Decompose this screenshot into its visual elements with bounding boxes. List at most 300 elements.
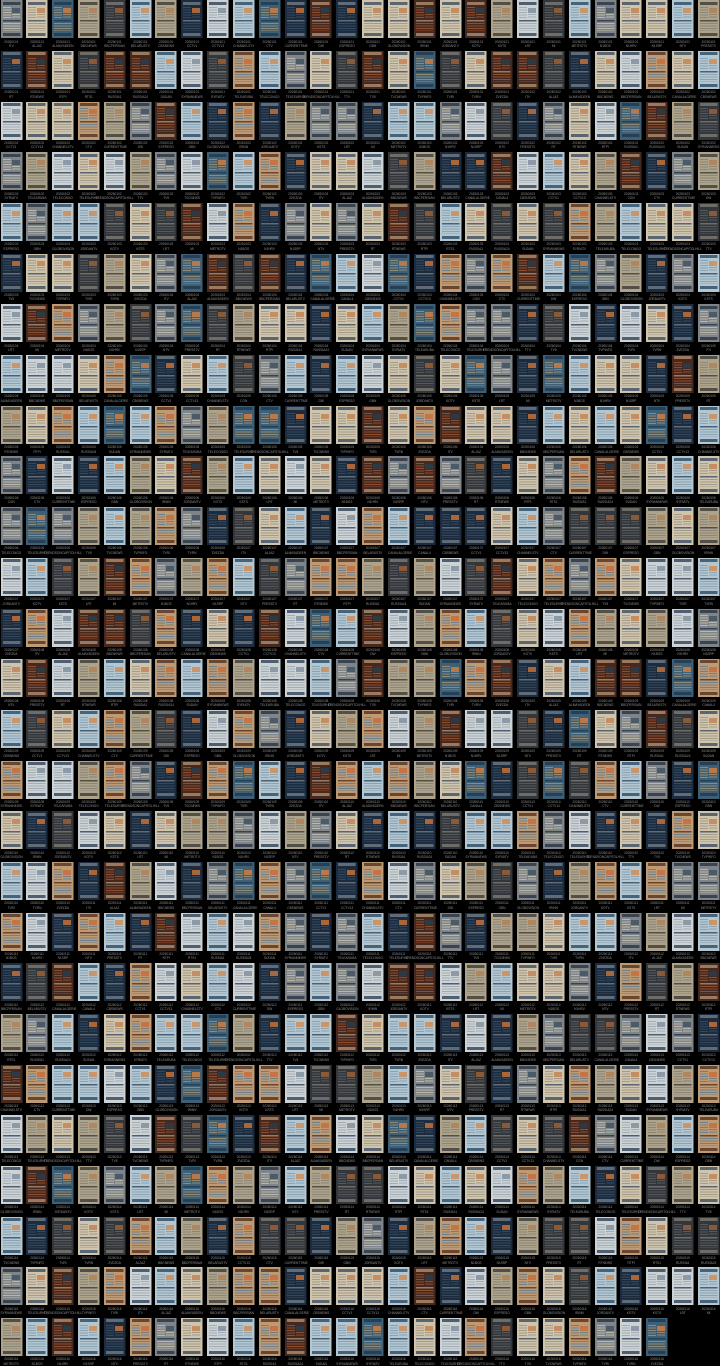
thumb TELECONGO (181, 1014, 207, 1064)
thumb ALMAYADEEN: 20260110 (366, 800, 380, 804)
thumb SYRIANNEWS: 20260101 (185, 90, 199, 94)
thumb JORDANTV: 20260103 (82, 242, 96, 246)
thumb TVCNEWS (620, 558, 646, 608)
thumb ESPRESO (336, 355, 362, 406)
thumb CBSNEWS: 20260106 (624, 445, 638, 449)
thumb RUSSIA1 (465, 203, 491, 253)
thumb TV5 (362, 51, 388, 101)
thumb TELECONGO (440, 304, 465, 355)
thumb CBSNEWS: CBSNEWS (468, 1159, 484, 1163)
thumb RTPI (207, 1318, 233, 1366)
thumb CURRENTTIME: 20260104 (521, 293, 535, 297)
thumbnail row 19 (1, 913, 720, 960)
thumb SUDAN: SUDAN (445, 855, 456, 859)
thumb N1HRV: N1HRV (367, 500, 378, 504)
thumb SYRIANNEWS (181, 51, 207, 101)
thumb LRT: LRT (267, 500, 273, 504)
thumb TELEARUBA: 20260102 (30, 192, 44, 196)
thumb TVCNEWS: TVCNEWS (572, 348, 587, 352)
thumb GBN: 20260101 (366, 40, 380, 44)
thumb GBN: GBN (34, 247, 41, 251)
thumb TELECONGO: TELECONGO (595, 1210, 615, 1214)
thumb METROTV (517, 963, 543, 1014)
thumb BBCPERSIAN: BBCPERSIAN (182, 906, 202, 910)
thumb TVCNEWS: TVCNEWS (391, 703, 407, 707)
thumb RT: RT (9, 95, 13, 99)
thumb MI: 20260109 (392, 749, 406, 753)
thumb TVCNEWS (104, 507, 130, 558)
thumb CANALALGERIE (595, 1014, 620, 1064)
thumb TVRI: TVRI (163, 551, 170, 555)
thumb KOTV (285, 101, 310, 152)
thumb TVPINFO (78, 1267, 104, 1318)
thumb TVCNEWS (0, 1216, 26, 1267)
thumb JORDANTV: 20260113 (211, 1104, 225, 1108)
thumb RUSSIA1: RUSSIA1 (108, 95, 121, 99)
thumb RT: RT (706, 399, 711, 403)
thumb CTV: 20260116 (418, 1307, 431, 1311)
thumb N1SRP (285, 203, 310, 253)
thumb METROTV: METROTV (339, 1108, 355, 1112)
thumb JORDANTV: 20260102 (262, 141, 277, 145)
thumb ALJAZ: 20260116 (159, 1307, 173, 1311)
thumb N1SRP: N1SRP (290, 247, 301, 251)
thumb DW: DW (164, 754, 169, 758)
thumb TVPINFO: 20260102 (211, 192, 225, 196)
thumb RTS1: RTS1 (7, 1058, 15, 1062)
thumb ITV: 20260109 (521, 699, 535, 703)
thumb N1SRP: N1SRP (626, 399, 636, 403)
thumb TVRI (543, 912, 569, 963)
thumb N1SRP: 20260102 (469, 141, 483, 145)
thumb RUSSIA24 (78, 406, 104, 456)
thumb N1BOS (569, 355, 595, 406)
thumb CANAL4 (491, 152, 517, 203)
thumb RTPI: RTPI (266, 348, 273, 352)
thumb TTV: 20260112 (263, 1053, 276, 1057)
thumb GLOBOVISION: 20260112 (340, 1003, 354, 1007)
thumb CHANNELSTV (362, 862, 388, 912)
thumb LRT (78, 558, 104, 608)
thumb GBN: GBN (214, 754, 221, 758)
thumb KSTS: KSTS (59, 602, 67, 606)
thumb N1HRV: 20260105 (598, 394, 612, 398)
thumb JORDANTV: 20260112 (392, 1003, 406, 1007)
thumb METROTV (336, 1064, 362, 1115)
thumb PRESSTV (543, 710, 569, 760)
thumb DW (155, 710, 181, 760)
thumb RUSSIA24 (310, 304, 336, 355)
thumb MI (181, 203, 207, 253)
thumb TELECONGO (0, 507, 26, 558)
thumb RTPI: 20260112 (702, 1003, 716, 1007)
thumb CCTV13 (362, 1267, 388, 1318)
thumb RUSSIA1: 20260106 (572, 496, 587, 500)
thumb ITV (440, 406, 465, 456)
thumb RUSSIA24: 20260114 (469, 1205, 483, 1209)
thumb CBSNEWS (155, 0, 181, 51)
thumb KOTV: 20260103 (107, 242, 122, 246)
thumb CTV: CTV (215, 1007, 221, 1011)
thumb CCTV1 (130, 963, 155, 1014)
thumb LRT: LRT (163, 247, 169, 251)
thumb TV5: TV5 (292, 450, 298, 454)
thumb CURRENTTIME: 20260115 (288, 1256, 302, 1260)
thumb NTV: 20260104 (159, 344, 173, 348)
thumb N1BOS: 20260102 (417, 141, 432, 145)
thumb CBSNEWS: CBSNEWS (520, 196, 536, 200)
thumb BBCNEWS (155, 1216, 181, 1267)
thumb TVRI (155, 507, 181, 558)
thumb CCTV13: 20260109 (56, 749, 70, 753)
thumb N1BOS: N1BOS (574, 399, 585, 403)
thumb DW (465, 1267, 491, 1318)
thumb KSTS (491, 0, 517, 51)
thumb RTNEWS: 20260109 (598, 749, 612, 753)
thumb CURRENTTIME: CURRENTTIME (285, 1260, 308, 1264)
thumb KSTS (104, 1166, 130, 1216)
thumb DW: DW (319, 399, 324, 403)
thumb CANALALGERIE: 20260107 (392, 546, 406, 550)
thumb ALJAZ: 20260109 (547, 699, 561, 703)
thumb DW (595, 507, 620, 558)
thumb SUDAN (620, 1064, 646, 1115)
thumb PRESSTV: 20260103 (340, 242, 354, 246)
thumb RUSSIA1: RUSSIA1 (56, 450, 70, 454)
thumb ZVEZDA: 20260113 (237, 1155, 251, 1159)
thumb JORDANTV: JORDANTV (287, 754, 304, 758)
thumb RUSSIA1 (130, 659, 155, 710)
thumb SYRIATV: 20260101 (211, 90, 225, 94)
thumb ZVEZDA (207, 507, 233, 558)
thumb BBCPERSIAN: 20260107 (340, 546, 354, 550)
thumb RUSSIA24 (672, 710, 698, 760)
thumb BELARUSTV: 20260115 (211, 1256, 225, 1260)
thumb JORDANTV (78, 203, 104, 253)
thumb ALMAYADEEN: ALMAYADEEN (362, 196, 384, 200)
thumb N1HRV (595, 355, 620, 406)
thumb CCTV1 (181, 0, 207, 51)
thumb CGN: 20260106 (4, 496, 18, 500)
thumb NTV (104, 1318, 130, 1366)
thumb SYRIANNEWS (336, 1318, 362, 1366)
thumb CBSNEWS: 20260116 (314, 1307, 328, 1311)
thumb SYRIANNEWS (285, 912, 310, 963)
thumb TVRN: 20260116 (624, 1357, 638, 1361)
thumb GLOBOVISION: 20260110 (4, 851, 18, 855)
thumb CTV (595, 1115, 620, 1166)
thumb N1SRP: N1SRP (213, 602, 223, 606)
thumb RTPI: 20260109 (624, 749, 638, 753)
thumb GLOBOVISION (620, 253, 646, 304)
thumb SUDAN: 20260116 (314, 1357, 328, 1361)
thumb CBSNEWS: 20260109 (4, 749, 18, 753)
thumb PRESSTV: PRESSTV (546, 1260, 561, 1264)
thumb RTNEWS: RTNEWS (4, 450, 18, 454)
thumb CHANNELSTV: CHANNELSTV (181, 1007, 203, 1011)
thumb NTV: 20260105 (650, 394, 664, 398)
thumb TELEARUBA (336, 912, 362, 963)
thumb N1SRP: N1SRP (58, 956, 68, 960)
thumb TVRN: 20260102 (262, 192, 277, 196)
thumb ZVEZDA (672, 304, 698, 355)
thumb METROTV: METROTV (417, 754, 432, 758)
thumb trends (52, 1267, 78, 1318)
thumbnail row 21 (1, 1014, 720, 1062)
thumb CBSNEWS (207, 608, 233, 659)
thumb CHANNELSTV: 20260108 (288, 648, 302, 652)
thumb ITV: 20260104 (159, 293, 173, 297)
thumb PRESSTV (310, 811, 336, 862)
thumb TVPINFO: TVPINFO (211, 196, 225, 200)
thumb RTNEWS: 20260112 (676, 1003, 690, 1007)
thumb CHANNELSTV: 20260106 (702, 445, 716, 449)
thumb RT (465, 456, 491, 507)
thumb LRT (646, 862, 672, 912)
thumb N1SRP: 20260111 (56, 952, 70, 956)
thumb ALJAZ (26, 0, 52, 51)
thumb GLOBOVISION: GLOBOVISION (0, 855, 23, 859)
thumb RTS1: 20260116 (237, 1357, 251, 1361)
thumb N1HRV (620, 0, 646, 51)
thumb TELEARUBA (595, 203, 620, 253)
thumb BBCNEWS (517, 1014, 543, 1064)
thumb IRINN: IRINN (265, 754, 274, 758)
thumb SYRIATV (672, 456, 698, 507)
thumb CCTV1: CCTV1 (342, 1311, 352, 1315)
thumb CTV: CTV (602, 804, 608, 808)
thumb SYRIANNEWS: 20260102 (702, 141, 716, 145)
thumbnail row 14 (1, 659, 720, 707)
thumb ITV (620, 912, 646, 963)
thumb METROTV (181, 1166, 207, 1216)
thumb ZVEZDA (104, 1216, 130, 1267)
thumb BBCPERSIAN: BBCPERSIAN (543, 450, 564, 454)
thumb TVPINFO: TVPINFO (598, 348, 612, 352)
thumb RT (285, 558, 310, 608)
thumb CCTV1: 20260107 (469, 546, 483, 550)
thumb RTS1 (233, 1318, 259, 1366)
thumb GBN: 20260102 (185, 141, 199, 145)
thumb RTNEWS: RTNEWS (521, 1108, 535, 1112)
thumb CBSNEWS: 20260110 (495, 800, 509, 804)
thumb DW: 20260103 (702, 192, 716, 196)
thumb TVRI: 20260105 (366, 445, 380, 449)
thumb JORDANTV: 20260101 (443, 40, 457, 44)
thumb BBCPERSIAN: BBCPERSIAN (53, 399, 73, 403)
thumb TVPINFO: 20260107 (650, 597, 664, 601)
thumb CCTV13: 20260104 (417, 293, 432, 297)
thumb CHANNELSTV (78, 710, 104, 760)
thumb BBCPERSIAN (233, 1267, 259, 1318)
thumb CURRENTTIME: 20260112 (237, 1003, 251, 1007)
thumb N1BOS: 20260103 (237, 242, 251, 246)
thumb TTV: TTV (344, 95, 350, 99)
thumb TTV (130, 152, 155, 203)
thumb CANALALGERIE: 20260116 (288, 1307, 302, 1311)
thumb CURRENTTIME (672, 152, 698, 203)
thumb RTNEWS: RTNEWS (598, 754, 612, 758)
thumb NTV: 20260112 (598, 1003, 612, 1007)
thumb IRINN: IRINN (575, 1311, 584, 1315)
thumb TVCNEWS: 20260112 (314, 1053, 328, 1057)
thumb LRT (414, 1216, 440, 1267)
thumb TELECONGO: 20260113 (4, 1155, 18, 1159)
thumb CANAL4: CANAL4 (263, 906, 276, 910)
thumb RUSSIA24 (646, 101, 672, 152)
thumb trends (259, 406, 285, 456)
thumb RUSSIA24: 20260105 (82, 445, 96, 449)
thumb MI (491, 963, 517, 1014)
thumb SUDAN: SUDAN (626, 500, 637, 504)
thumb RTS1: 20260101 (82, 90, 96, 94)
thumb TELESURHD: TELESURHD (312, 703, 331, 707)
thumb GLOBOVISION: 20260116 (547, 1307, 561, 1311)
thumb SUDAN: 20260113 (624, 1104, 638, 1108)
thumb ITV: ITV (319, 804, 324, 808)
thumb RUSSIA1: 20260112 (30, 1053, 44, 1057)
thumb BELARUSTV: BELARUSTV (260, 1311, 279, 1315)
thumb BBCPERSIAN: BBCPERSIAN (414, 804, 435, 808)
thumb TELECONGO (207, 406, 233, 456)
thumb PRESSTV: 20260113 (469, 1104, 483, 1108)
thumb N1SRP (414, 1064, 440, 1115)
thumb RUSSIA24 (388, 558, 414, 608)
thumb ALMAYADEEN (52, 0, 78, 51)
thumb ALJAZ: 20260110 (340, 800, 354, 804)
thumbnail row 26 (0, 1267, 720, 1315)
thumb CBSNEWS (620, 406, 646, 456)
thumb ALJAZ: ALJAZ (32, 44, 42, 48)
thumb METROTV: 20260106 (314, 496, 328, 500)
thumb CANALALGERIE: 20260105 (107, 394, 122, 398)
thumb GLOBOVISION: GLOBOVISION (207, 145, 229, 149)
thumb TVRN: TVRN (575, 956, 584, 960)
thumb TVRN: TVRN (110, 297, 119, 301)
thumb ALMAYADEEN: ALMAYADEEN (311, 1159, 332, 1163)
thumb ESPRESO (672, 1115, 698, 1166)
thumb trends: 20260109 (133, 800, 147, 804)
thumb SYRIANNEWS (465, 811, 491, 862)
thumb NTV: NTV (292, 1210, 299, 1214)
thumb CCTV1 (26, 710, 52, 760)
thumb CURRENTTIME (233, 963, 259, 1014)
thumb trends: TRENDSONCAPITOLHILL (483, 348, 521, 352)
thumb CCTV13 (414, 253, 440, 304)
thumb JORDANTV: 20260110 (56, 851, 70, 855)
thumb NTV: 20260106 (417, 496, 432, 500)
thumb CCTV13 (233, 1216, 259, 1267)
thumb RUSSIA24: RUSSIA24 (158, 703, 174, 707)
thumb RT (207, 304, 233, 355)
thumb SUDAN (491, 1166, 517, 1216)
thumb IRINN (259, 710, 285, 760)
thumb BBCNEWS: 20260109 (598, 699, 612, 703)
thumb CHANNELSTV (440, 253, 465, 304)
thumb ESPRESO (181, 710, 207, 760)
thumb N1HRV (672, 608, 698, 659)
thumb NTV: NTV (525, 1260, 531, 1264)
thumb TELEARUBA: TELEARUBA (338, 956, 356, 960)
thumb SYRIATV (543, 1166, 569, 1216)
thumb METROTV: METROTV (133, 602, 148, 606)
thumb DW: DW (603, 551, 608, 555)
thumb TELEARUBA (517, 811, 543, 862)
thumb N1SRP: N1SRP (393, 500, 404, 504)
thumb TELEARUBA: TELEARUBA (699, 500, 718, 504)
thumb ITV (698, 304, 720, 355)
thumb TV5: TV5 (86, 551, 92, 555)
thumb ALMAYADEEN: 20260116 (185, 1307, 199, 1311)
thumb KSTS (440, 963, 465, 1014)
thumb CGN: CGN (473, 297, 480, 301)
thumb TVPINFO: 20260110 (702, 851, 716, 855)
thumb TV5: TV5 (473, 956, 479, 960)
thumb TV5 (155, 152, 181, 203)
thumb CANALALGERIE (52, 963, 78, 1014)
thumb KSTS (259, 1064, 285, 1115)
thumb ALJAZ (52, 608, 78, 659)
thumb TVPINFO: TVPINFO (521, 956, 535, 960)
thumb MI: MI (681, 906, 685, 910)
thumb LRT: 20260104 (4, 344, 18, 348)
thumb CCTV1: CCTV1 (135, 1007, 146, 1011)
thumb BBCPERSIAN: BBCPERSIAN (621, 703, 641, 707)
thumb JORDANTV (0, 558, 26, 608)
thumb CCTV1: CCTV1 (187, 44, 197, 48)
thumb SYRIATV: SYRIATV (134, 1058, 147, 1062)
thumb RTNEWS (233, 304, 259, 355)
thumb TVRI: TVRI (59, 1260, 67, 1264)
thumb TVRI (672, 558, 698, 608)
thumb ITV: ITV (35, 652, 40, 656)
thumb PRESSTV: PRESSTV (30, 703, 45, 707)
thumb TV5: TV5 (112, 1159, 117, 1163)
thumb NTV (155, 304, 181, 355)
thumb TVCNEWS: 20260103 (30, 293, 44, 297)
thumb CHANNELSTV: CHANNELSTV (1, 1108, 22, 1112)
thumb N1HRV: N1HRV (574, 1007, 585, 1011)
thumb RTPI: RTPI (602, 145, 609, 149)
thumb NTV (285, 1166, 310, 1216)
thumb RT (543, 101, 569, 152)
thumb RTS1: RTS1 (550, 500, 558, 504)
thumb IRINN: 20260106 (159, 496, 173, 500)
thumbnail row 20 (1, 963, 720, 1011)
thumb CANALALGERIE: 20260113 (598, 1053, 612, 1057)
thumb GLOBOVISION (52, 203, 78, 253)
thumb METROTV: METROTV (701, 906, 716, 910)
thumb SYRIANNEWS: SYRIANNEWS (336, 1362, 358, 1366)
thumb RUSSIA1 (26, 1014, 52, 1064)
thumb CTV: 20260105 (262, 394, 277, 398)
thumb CGN (233, 355, 259, 406)
thumb ESPRESO (569, 253, 595, 304)
thumb CBSNEWS (285, 862, 310, 912)
thumb BBCNEWS (310, 507, 336, 558)
thumb BBCNEWS: BBCNEWS (158, 906, 174, 910)
thumb RTNEWS (595, 710, 620, 760)
thumb CBSNEWS: 20260102 (702, 90, 716, 94)
thumb ITV: 20260116 (133, 1307, 147, 1311)
thumb ALMAYADEEN: 20260108 (82, 648, 96, 652)
thumb trends: TRENDSONCAPITOLHILL (560, 602, 599, 606)
thumb GLOBOVISION (336, 963, 362, 1014)
thumb ALMAYADEEN (569, 659, 595, 710)
thumb RTNEWS (672, 963, 698, 1014)
thumb ESPRESO: ESPRESO (468, 906, 484, 910)
thumb TVRI: TVRI (85, 297, 92, 301)
